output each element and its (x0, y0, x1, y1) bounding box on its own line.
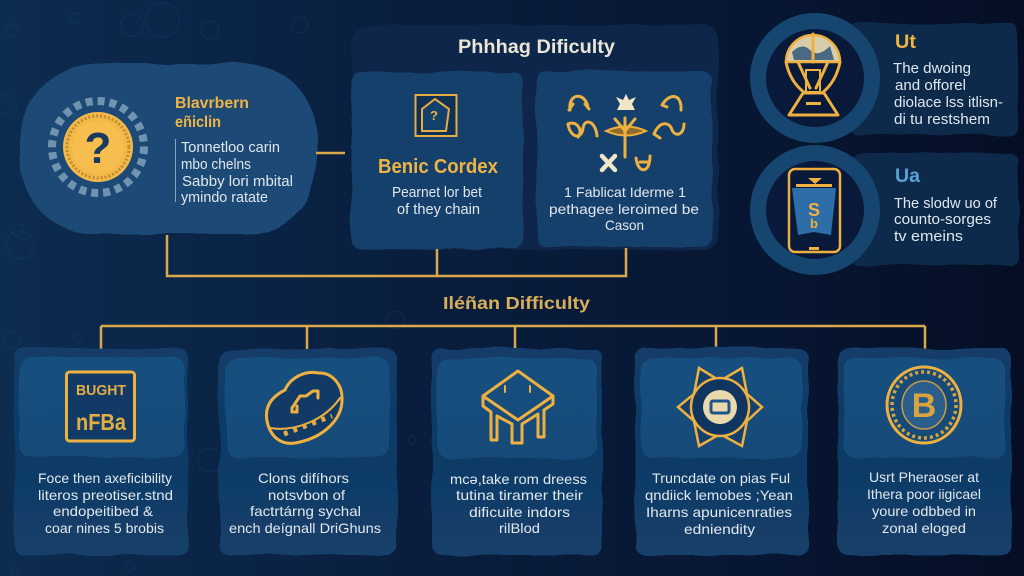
text block: card 4 (645, 470, 793, 537)
heading: Ut: Ut (895, 32, 917, 53)
text block: card 3: tutina tiramer their (456, 487, 583, 503)
text block: Ut: and offorel (895, 78, 966, 94)
icon: house document: ? (430, 108, 438, 123)
text block: card 1: endopeitibed & (53, 503, 154, 519)
circle icon: cup card (758, 153, 872, 267)
panel: Ut (758, 21, 1018, 135)
panel: left question blob (21, 64, 317, 234)
panel: card 4 (635, 348, 808, 555)
text block: Benic Cordex (392, 185, 482, 218)
text block: card 4: Iharns apunicenraties (646, 504, 792, 520)
text block: Ut: The dwoing (893, 61, 971, 77)
text block: Ut (893, 61, 1003, 128)
heading: left blob: Blavrbern (175, 95, 249, 112)
circle icon: dome (758, 21, 872, 135)
icon: house document (416, 95, 456, 136)
text block: symbols card: 1 Fablicat Iderme 1 (564, 184, 686, 200)
panel: upper difficulty backdrop (352, 25, 718, 250)
text block: card 2: ench deígnall DriGhuns (229, 520, 381, 536)
text block: left blob: mbo chelns (181, 157, 251, 173)
icon: symbol cluster (568, 94, 684, 170)
text block: Ut: diolace lss itlisn- (894, 95, 1003, 111)
text block: card 5: Usrt Pheraoser at (869, 469, 979, 485)
heading: Ilénan Difficulty: Iléñan Difficulty (443, 293, 590, 313)
icon: question coin: ? (85, 124, 111, 173)
text block: card 1: coar nines 5 brobis (45, 520, 164, 536)
text block: card 5: zonal eloged (882, 520, 966, 536)
text block: left blob (176, 139, 293, 206)
text block: card 5 (867, 469, 981, 536)
text block: left blob: Sabby lori mbital (182, 174, 293, 190)
icon: table (483, 371, 553, 443)
heading: Phhhag Difficulty: Phhhag Dificulty (458, 37, 615, 58)
icon: bitcoin coin: B (912, 387, 936, 425)
text block: Ua: tv emeins (894, 229, 963, 245)
heading: left blob (175, 95, 249, 131)
circle icon: cup card: b (810, 216, 818, 231)
icon: brain chip (266, 372, 342, 443)
heading: Ua: Ua (895, 166, 920, 187)
text block: card 1: literos preotiser.stnd (38, 487, 173, 503)
icon: atom star (678, 368, 762, 446)
text block: card 4: qndiick lemobes ;Yean (645, 487, 793, 503)
text block: card 5: Ithera poor iigicael (867, 486, 981, 502)
text block: card 2: factrtárng sychal (250, 503, 361, 519)
text block: Benic Cordex: of they chain (397, 202, 480, 218)
panel: Benic Cordex card (351, 72, 523, 249)
text block: card 3 (450, 471, 587, 536)
background bubbles (0, 3, 416, 574)
text block: card 4: Truncdate on pias Ful (652, 470, 790, 486)
text block: card 2: notsvbon of (268, 487, 345, 503)
text block: card 3: dificuite indors (469, 504, 570, 520)
text block: card 3: mcə,take rom dreess (450, 471, 587, 487)
text block: Ua: The slodw uo of (894, 196, 998, 212)
text block: card 1: Foce then axeficibility (38, 470, 172, 486)
icon: labelled square: nFBa (76, 409, 126, 435)
connector lines (101, 153, 925, 350)
icon: bitcoin coin (887, 367, 961, 443)
panel: card 3 (432, 348, 602, 555)
heading: Benic Cordex: Benic Cordex (378, 156, 498, 178)
text block: left blob: Tonnetloo carin (181, 140, 280, 156)
panel: card 2 (219, 349, 397, 555)
text block: symbols card: Cason (605, 217, 644, 233)
text block: symbols card: pethagee leroimed be (549, 201, 699, 217)
text block: card 2: Clons difíhors (258, 470, 349, 486)
icon: labelled square: BUGHT (76, 382, 126, 399)
circle icon: cup card: S (808, 200, 820, 220)
text block: symbols card (549, 184, 699, 233)
panel: card 1 (14, 348, 188, 555)
text block: Ua: counto-sorges (894, 212, 991, 228)
text block: card 1 (38, 470, 173, 536)
text block: Benic Cordex: Pearnet lor bet (392, 185, 482, 201)
text block: left blob: ymindo ratate (181, 190, 268, 206)
icon: question coin (52, 101, 144, 193)
text block: card 5: youre odbbed in (872, 503, 976, 519)
text block: Ut: di tu restshem (894, 112, 990, 128)
text block: card 2 (229, 470, 381, 536)
text block: card 4: edniendity (684, 521, 755, 537)
panel: Ua (758, 153, 1018, 267)
panel: card 5 (838, 348, 1011, 555)
heading: left blob: eñiclin (175, 114, 221, 131)
icon: labelled square (66, 372, 134, 441)
text block: card 3: rilBlod (499, 520, 540, 536)
panel: symbols card (537, 71, 712, 247)
text block: Ua (894, 196, 998, 245)
